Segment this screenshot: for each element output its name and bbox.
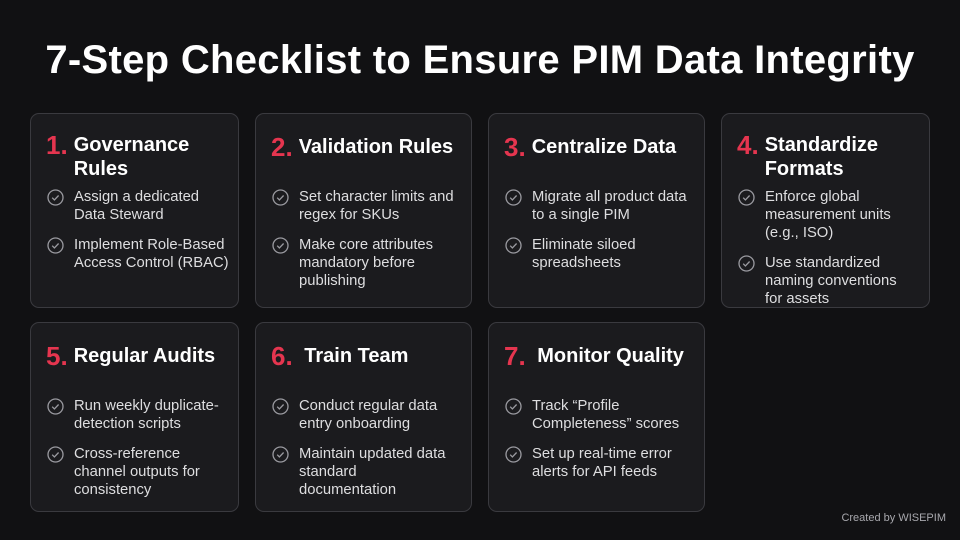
heading: Governance — [74, 134, 189, 156]
checklist: naming conventions — [765, 273, 897, 289]
checklist: Set up real-time error — [532, 446, 672, 462]
checklist: Migrate all product data — [532, 189, 687, 205]
checklist — [505, 189, 687, 271]
panel: regular audits — [30, 322, 239, 512]
checklist: Data Steward — [74, 207, 164, 223]
heading — [46, 341, 215, 371]
heading — [271, 341, 408, 371]
heading: Validation Rules — [299, 136, 453, 158]
heading — [271, 132, 453, 162]
checklist — [47, 398, 219, 498]
checklist: Run weekly duplicate- — [74, 398, 219, 414]
heading: Standardize — [765, 134, 878, 156]
checklist: Cross-reference — [74, 446, 180, 462]
panel: validation rules — [255, 113, 472, 308]
heading: Regular Audits — [74, 345, 215, 367]
checklist: Make core attributes — [299, 237, 433, 253]
checklist: Completeness” scores — [532, 416, 679, 432]
heading: Train Team — [304, 345, 408, 367]
heading: 5. — [46, 341, 68, 371]
heading: Formats — [765, 158, 844, 180]
checklist: measurement units — [765, 207, 891, 223]
checklist: Implement Role-Based — [74, 237, 225, 253]
heading: Rules — [74, 158, 128, 180]
heading: 3. — [504, 132, 526, 162]
checklist: detection scripts — [74, 416, 181, 432]
checklist — [272, 398, 446, 498]
checklist: Enforce global — [765, 189, 860, 205]
checklist: channel outputs for — [74, 464, 200, 480]
panel: train team — [255, 322, 472, 512]
checklist: Set character limits and — [299, 189, 454, 205]
checklist: (e.g., ISO) — [765, 225, 833, 241]
checklist: Use standardized — [765, 255, 880, 271]
checklist: Access Control (RBAC) — [74, 255, 229, 271]
checklist: Assign a dedicated — [74, 189, 199, 205]
heading: 4. — [737, 130, 759, 160]
checklist: regex for SKUs — [299, 207, 399, 223]
checklist — [505, 398, 679, 480]
panel: standardize formats — [721, 113, 930, 308]
panel: governance rules — [30, 113, 239, 308]
panel: monitor quality — [488, 322, 705, 512]
title: 7-Step Checklist to Ensure PIM Data Integrity — [45, 38, 915, 82]
checklist: Conduct regular data — [299, 398, 437, 414]
heading — [46, 130, 189, 180]
checklist: alerts for API feeds — [532, 464, 657, 480]
checklist: Track “Profile — [532, 398, 619, 414]
checklist: for assets — [765, 291, 829, 307]
checklist: standard — [299, 464, 357, 480]
checklist: entry onboarding — [299, 416, 410, 432]
heading — [504, 132, 676, 162]
heading — [504, 341, 684, 371]
heading: 7. — [504, 341, 526, 371]
checklist: to a single PIM — [532, 207, 630, 223]
checklist: Eliminate siloed — [532, 237, 636, 253]
checklist: consistency — [74, 482, 151, 498]
checklist: publishing — [299, 273, 366, 289]
heading: Monitor Quality — [537, 345, 684, 367]
footer credit: Created by WISEPIM — [841, 512, 946, 524]
checklist: spreadsheets — [532, 255, 621, 271]
heading: Centralize Data — [532, 136, 676, 158]
checklist: documentation — [299, 482, 396, 498]
heading: 1. — [46, 130, 68, 160]
heading — [737, 130, 878, 180]
heading: 6. — [271, 341, 293, 371]
checklist: Maintain updated data — [299, 446, 445, 462]
heading: 2. — [271, 132, 293, 162]
checklist: mandatory before — [299, 255, 415, 271]
checklist — [738, 189, 897, 307]
checklist — [47, 189, 229, 271]
checklist — [272, 189, 454, 289]
panel: centralize data — [488, 113, 705, 308]
